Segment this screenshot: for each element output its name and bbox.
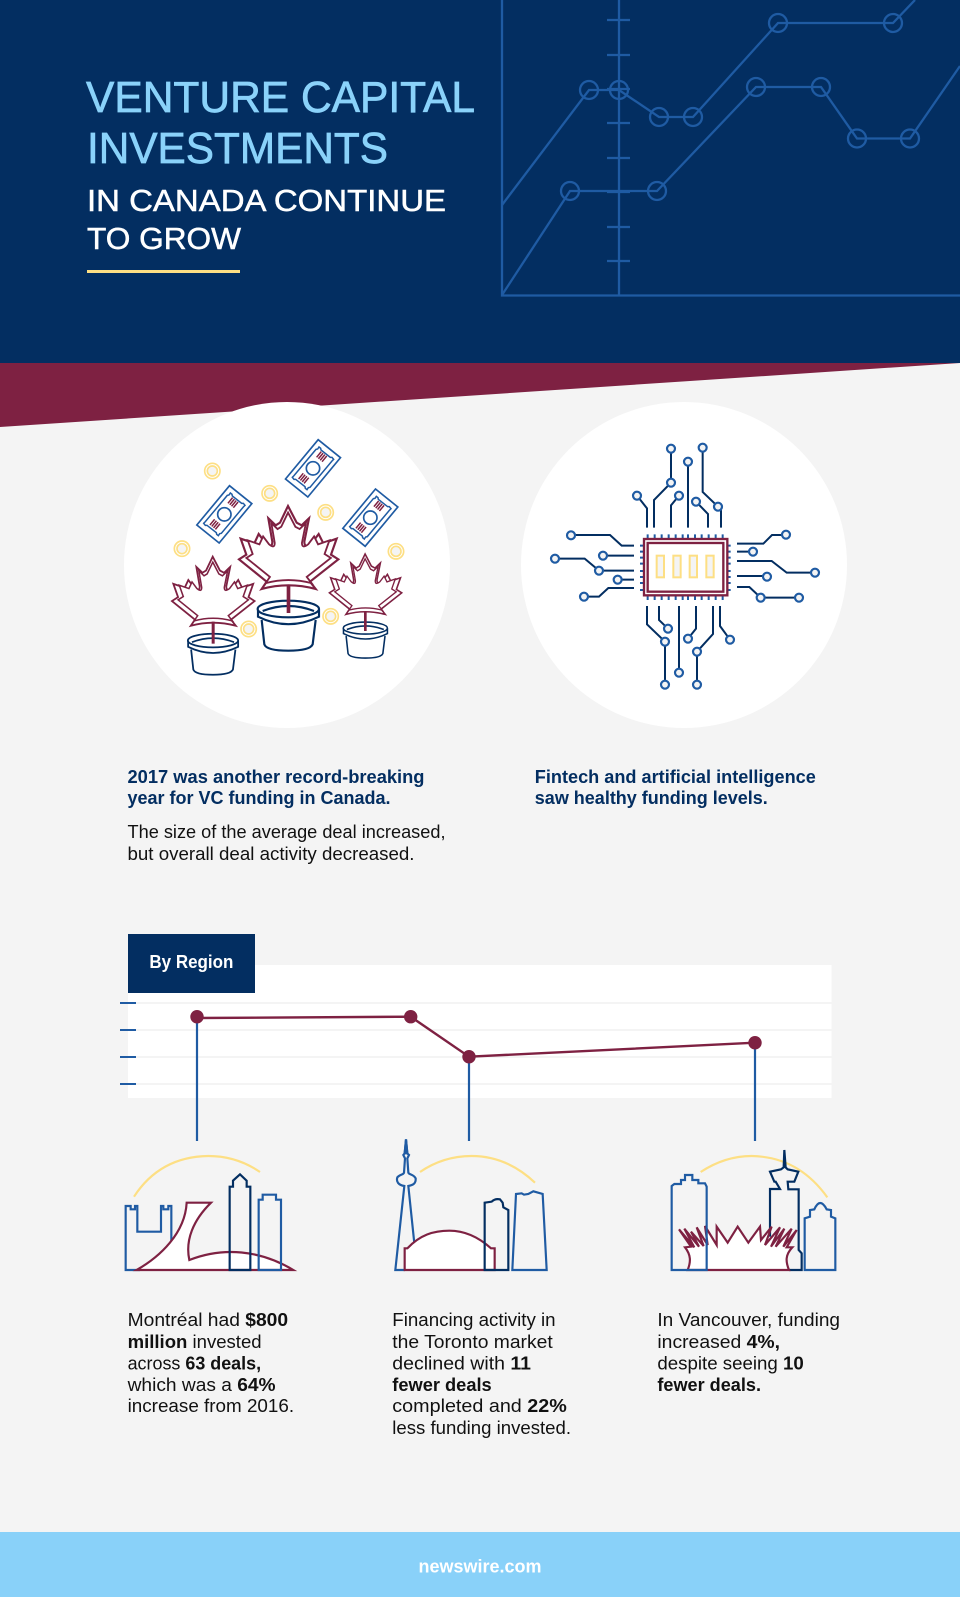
text block: Montreal: across 63 deals,	[128, 1354, 261, 1374]
text block: Toronto: completed and 22%	[392, 1396, 567, 1416]
section label: By Region	[128, 934, 255, 993]
section label: By Region: By Region	[149, 952, 233, 972]
subtitle line 2: TO GROW	[87, 221, 242, 256]
circuit nodes	[551, 444, 819, 689]
data line	[197, 1017, 755, 1057]
text block: Toronto: declined with 11	[392, 1354, 531, 1374]
title line 1: VENTURE CAPITAL	[86, 73, 475, 122]
text block: Toronto: less funding invested.	[392, 1418, 571, 1438]
body	[128, 822, 446, 864]
text block: fintech and AI: Fintech and artificial intelligence	[535, 767, 816, 787]
icon: centre potted maple	[239, 506, 338, 651]
text block: Montreal	[127, 1310, 294, 1416]
icon: gold coins	[174, 463, 404, 637]
grid lines	[128, 1003, 832, 1084]
axis ticks	[120, 1003, 136, 1084]
text block: Montreal: increase from 2016.	[128, 1396, 294, 1416]
body: The size of the average deal increased,	[128, 822, 446, 842]
text block: Toronto: Financing activity in	[392, 1310, 556, 1330]
maroon diagonal band	[0, 363, 960, 427]
text block: Vancouver: despite seeing 10	[657, 1354, 804, 1374]
text block: Toronto	[392, 1310, 571, 1438]
subtitle line 1: IN CANADA CONTINUE	[87, 183, 446, 218]
text block: Montreal: which was a 64%	[127, 1375, 276, 1395]
icon: Toronto skyline	[395, 1139, 547, 1270]
text block: fintech and AI: saw healthy funding levels.	[535, 788, 768, 808]
icon: left potted maple	[172, 557, 255, 675]
heading: year for VC funding in Canada.	[128, 788, 390, 808]
title	[86, 73, 475, 273]
text block: Vancouver: fewer deals.	[657, 1375, 761, 1395]
icon: right potted maple	[329, 554, 402, 658]
heading	[128, 767, 424, 808]
text block: Vancouver: increased 4%,	[657, 1332, 780, 1352]
text block: Vancouver: In Vancouver, funding	[657, 1310, 840, 1330]
data points	[190, 1010, 762, 1063]
header line chart decoration	[502, 0, 960, 296]
line chart: by region	[120, 965, 832, 1141]
title line 2: INVESTMENTS	[87, 124, 388, 173]
text block: fintech and AI	[535, 767, 816, 808]
text block: Vancouver	[657, 1310, 840, 1395]
icon: maple trees and money	[124, 402, 450, 728]
footer: newswire.com	[418, 1556, 542, 1576]
icon: circuit chip	[521, 402, 847, 728]
drop lines to cities	[197, 1017, 755, 1141]
heading: 2017 was another record-breaking	[128, 767, 424, 787]
chip pins	[640, 534, 731, 600]
chip yellow cells	[657, 556, 714, 577]
text block: record-breaking year	[128, 767, 446, 864]
text block: Toronto: fewer deals	[392, 1375, 492, 1395]
circuit traces	[555, 448, 815, 685]
icon: banknotes	[197, 440, 398, 546]
footer	[0, 1532, 960, 1597]
header banner	[0, 0, 960, 427]
text block: Montreal: Montréal had $800	[128, 1310, 288, 1330]
text block: Montreal: million invested	[128, 1332, 262, 1352]
icon: Vancouver skyline	[672, 1150, 835, 1270]
chip body	[644, 539, 727, 595]
body: but overall deal activity decreased.	[128, 844, 414, 864]
yellow underline	[87, 270, 240, 273]
icon: Montreal skyline	[126, 1156, 293, 1270]
text block: Toronto: the Toronto market	[392, 1332, 553, 1352]
